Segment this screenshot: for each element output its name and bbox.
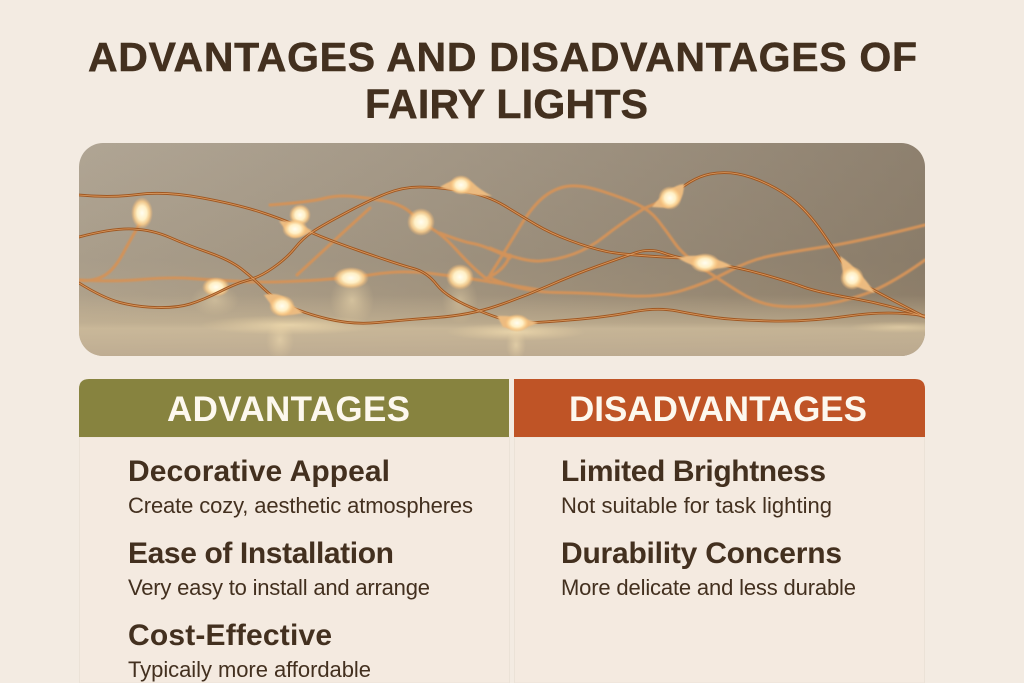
advantages heading: ADVANTAGES bbox=[167, 390, 410, 429]
photo: copper wire fairy lights bbox=[79, 143, 950, 361]
title bbox=[88, 34, 917, 127]
item: decorative appeal: Create cozy, aesthetic atmospheres bbox=[128, 493, 473, 518]
item: limited brightness bbox=[561, 455, 832, 518]
item: decorative appeal bbox=[128, 455, 473, 518]
item: ease of installation: Very easy to install and arrange bbox=[128, 575, 430, 600]
item: durability concerns bbox=[561, 537, 856, 600]
title: ADVANTAGES AND DISADVANTAGES OF bbox=[88, 34, 917, 80]
item: cost-effective: Typicaily more affordable bbox=[128, 657, 371, 682]
advantages body bbox=[80, 437, 510, 683]
item: durability concerns: More delicate and less durable bbox=[561, 575, 856, 600]
blurred background wires bbox=[79, 186, 925, 307]
item: cost-effective: Cost-Effective bbox=[128, 619, 332, 652]
blurred bulbs bbox=[131, 197, 474, 297]
item: decorative appeal: Decorative Appeal bbox=[128, 455, 390, 488]
in-focus bulbs bbox=[269, 175, 864, 332]
panel: disadvantages bbox=[514, 379, 925, 683]
item: ease of installation bbox=[128, 537, 430, 600]
panel: advantages bbox=[79, 379, 510, 683]
sharp copper wires bbox=[79, 173, 925, 323]
item: cost-effective bbox=[128, 619, 371, 682]
advantages header band bbox=[79, 379, 509, 437]
item: limited brightness: Not suitable for task lighting bbox=[561, 493, 832, 518]
disadvantages header band bbox=[514, 379, 925, 437]
disadvantages heading: DISADVANTAGES bbox=[569, 390, 867, 429]
title: FAIRY LIGHTS bbox=[365, 81, 648, 127]
wire sheaths around in-focus bulbs bbox=[264, 179, 875, 329]
disadvantages body bbox=[514, 437, 924, 683]
item: ease of installation: Ease of Installation bbox=[128, 537, 394, 570]
item: durability concerns: Durability Concerns bbox=[561, 537, 842, 570]
item: limited brightness: Limited Brightness bbox=[561, 455, 826, 488]
